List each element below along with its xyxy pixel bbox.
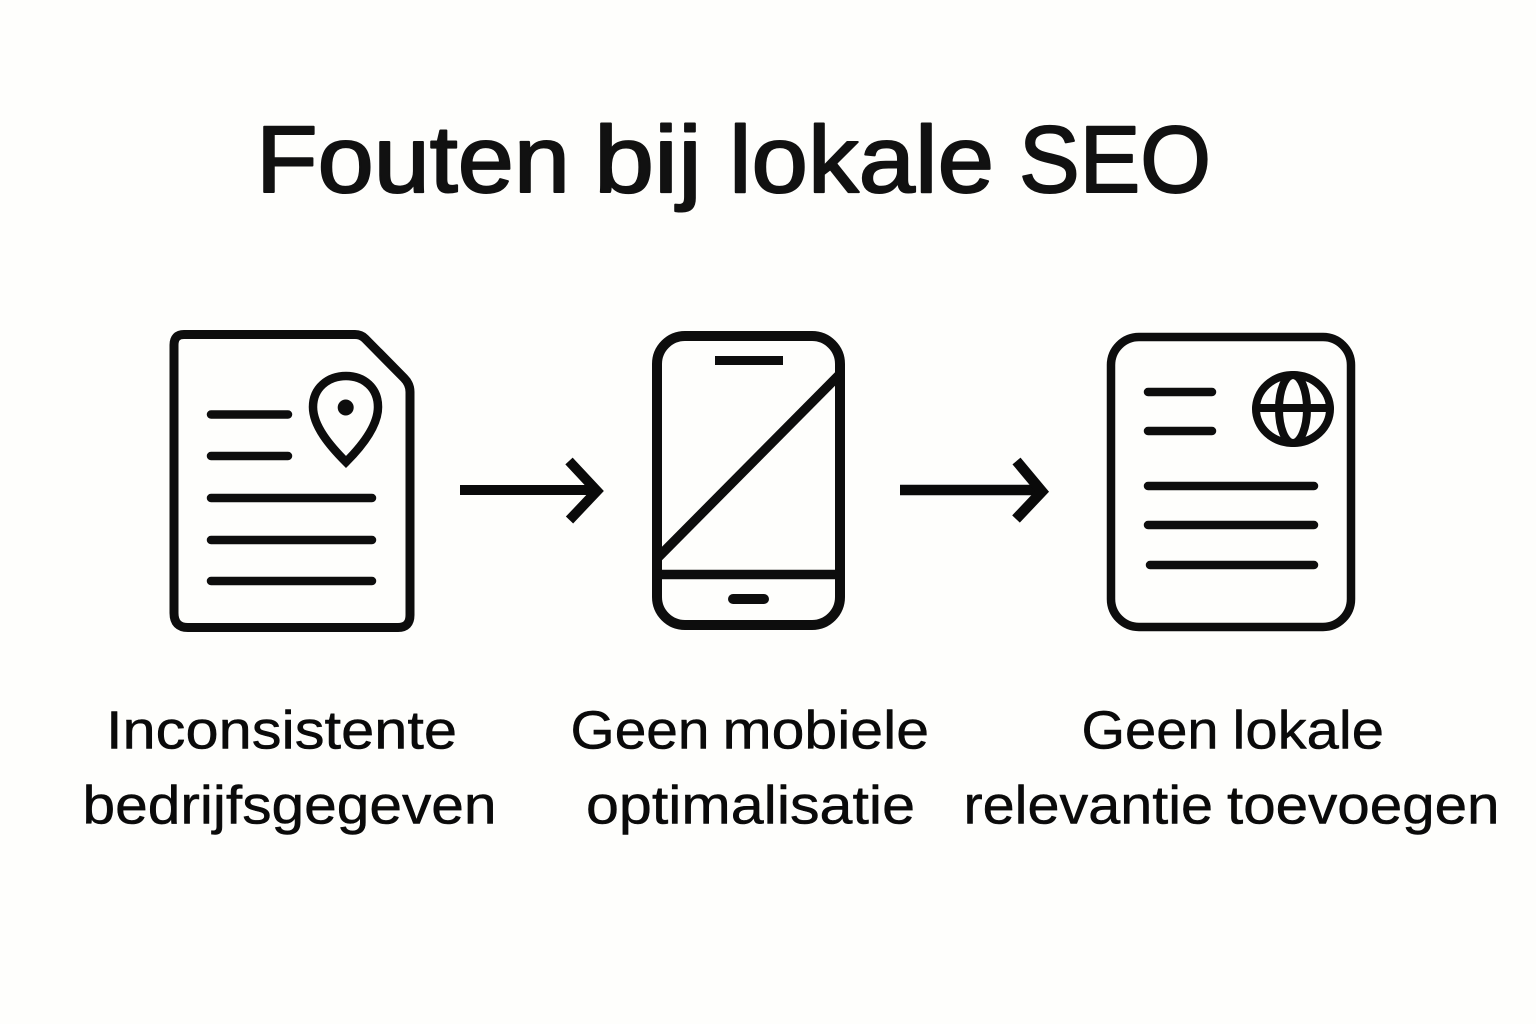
home button bbox=[733, 594, 764, 604]
label: inconsistente bedrijfsgegeven: bedrijfsgegeven bbox=[82, 776, 497, 836]
pin dot bbox=[338, 400, 354, 416]
screen diagonal bbox=[658, 375, 839, 558]
label: geen lokale relevantie toevoegen: Geen bbox=[1082, 700, 1218, 760]
title bbox=[256, 107, 1211, 213]
screen divider bbox=[657, 570, 840, 579]
location pin bbox=[313, 376, 378, 462]
arrow: second to third bbox=[900, 461, 1042, 519]
icon: document with globe bbox=[1111, 337, 1351, 627]
label: inconsistente bedrijfsgegeven: Inconsistente bbox=[106, 700, 457, 760]
label: geen mobiele optimalisatie: Geen bbox=[570, 700, 710, 760]
arrow: first to second bbox=[460, 461, 598, 520]
label: geen mobiele optimalisatie: optimalisatie bbox=[586, 776, 915, 836]
speaker bbox=[715, 356, 783, 365]
label: geen lokale relevantie toevoegen: relevantie bbox=[964, 776, 1213, 836]
text lines bbox=[1148, 392, 1314, 565]
label: geen lokale relevantie toevoegen: toevoegen bbox=[1227, 776, 1500, 836]
title: SEO bbox=[1019, 107, 1211, 213]
text lines bbox=[211, 414, 372, 581]
icon: document with location pin bbox=[174, 334, 410, 628]
label: geen lokale relevantie toevoegen: lokale bbox=[1232, 700, 1384, 760]
globe bbox=[1256, 375, 1330, 443]
icon: smartphone bbox=[657, 336, 840, 625]
label: geen mobiele optimalisatie: mobiele bbox=[722, 700, 929, 760]
title: lokale bbox=[729, 107, 994, 213]
title: Fouten bbox=[256, 107, 570, 213]
label: geen mobiele optimalisatie bbox=[570, 700, 929, 836]
label: inconsistente bedrijfsgegeven bbox=[82, 700, 497, 836]
label: geen lokale relevantie toevoegen bbox=[964, 700, 1500, 836]
title: bij bbox=[594, 107, 702, 213]
